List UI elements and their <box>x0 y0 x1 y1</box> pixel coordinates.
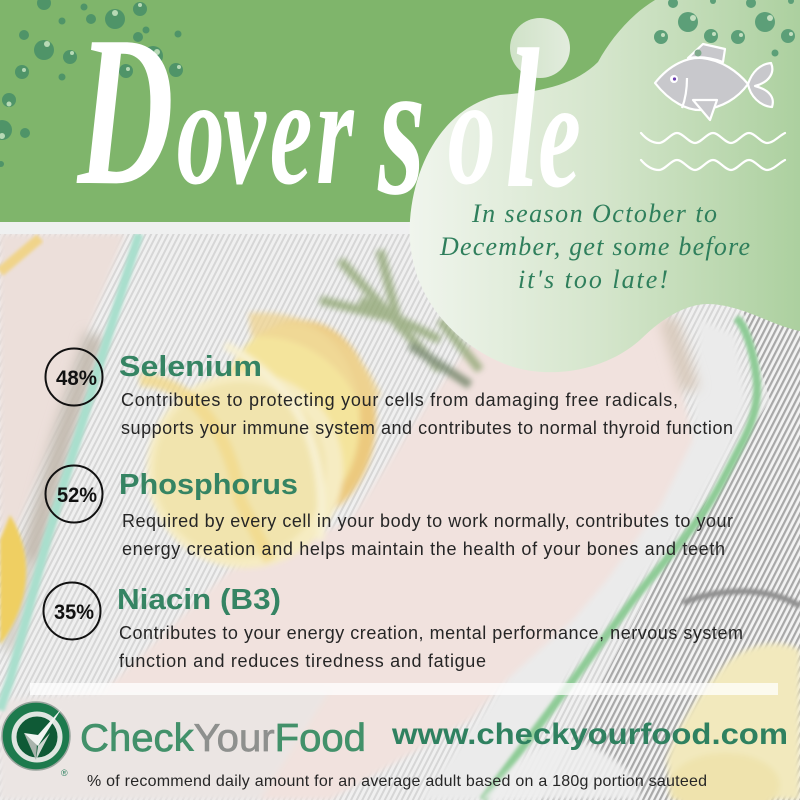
bubbles: top right <box>654 0 795 56</box>
phosphorus heading: Phosphorus <box>119 469 298 501</box>
glass dish rim lines <box>0 234 800 800</box>
title: o <box>448 45 496 217</box>
nutrient: niacin <box>44 582 743 671</box>
bubbles: top left <box>0 0 183 167</box>
registered mark: ® <box>61 768 68 778</box>
background photo: fish fillets, lemon and glass dish <box>0 234 800 800</box>
header band <box>0 0 800 222</box>
season note <box>439 199 750 294</box>
selenium description <box>121 390 733 438</box>
divider bar <box>30 683 778 695</box>
lemon pieces at left edge <box>0 238 40 645</box>
selenium heading: Selenium <box>119 351 262 383</box>
selenium description: Contributes to protecting your cells from damaging free radicals, <box>121 390 678 410</box>
niacin heading: Niacin (B3) <box>117 584 281 616</box>
season note: In season October to <box>471 199 717 228</box>
niacin percentage badge <box>44 582 100 640</box>
phosphorus description <box>122 511 733 559</box>
blob panel behind fish and season note <box>410 0 800 372</box>
logo mark <box>2 702 70 770</box>
niacin percentage badge: 35% <box>54 601 94 624</box>
lemon slices <box>140 320 376 568</box>
phosphorus description: Required by every cell in your body to work normally, contributes to your <box>122 511 733 531</box>
decorative circle behind title <box>510 18 570 78</box>
nutrient: phosphorus <box>46 466 733 559</box>
icon: waves <box>641 133 785 170</box>
niacin description: function and reduces tiredness and fatigue <box>119 651 486 671</box>
phosphorus percentage badge <box>46 466 102 522</box>
title: over <box>177 45 396 217</box>
title: s <box>377 20 425 236</box>
website url: www.checkyourfood.com <box>391 718 788 751</box>
title: e <box>538 48 581 220</box>
season note: it's too late! <box>518 265 668 294</box>
icon: fish <box>655 44 773 120</box>
logo wordmark: CheckYourFood <box>80 717 366 760</box>
phosphorus description: energy creation and helps maintain the health of your bones and teeth <box>122 539 725 559</box>
footnote: % of recommend daily amount for an average adult based on a 180g portion sauteed <box>87 773 707 790</box>
selenium percentage badge: 48% <box>56 367 97 390</box>
bottom right lemon and bowl <box>480 643 800 800</box>
niacin description: Contributes to your energy creation, mental performance, nervous system <box>119 623 743 643</box>
dill sprig <box>320 250 480 385</box>
selenium description: supports your immune system and contributes to normal thyroid function <box>121 418 733 438</box>
title: l <box>505 8 540 229</box>
phosphorus percentage badge: 52% <box>57 484 97 507</box>
season note: December, get some before <box>439 232 750 261</box>
niacin description <box>119 623 743 671</box>
nutrient: selenium <box>46 348 733 438</box>
selenium percentage badge <box>46 348 102 406</box>
